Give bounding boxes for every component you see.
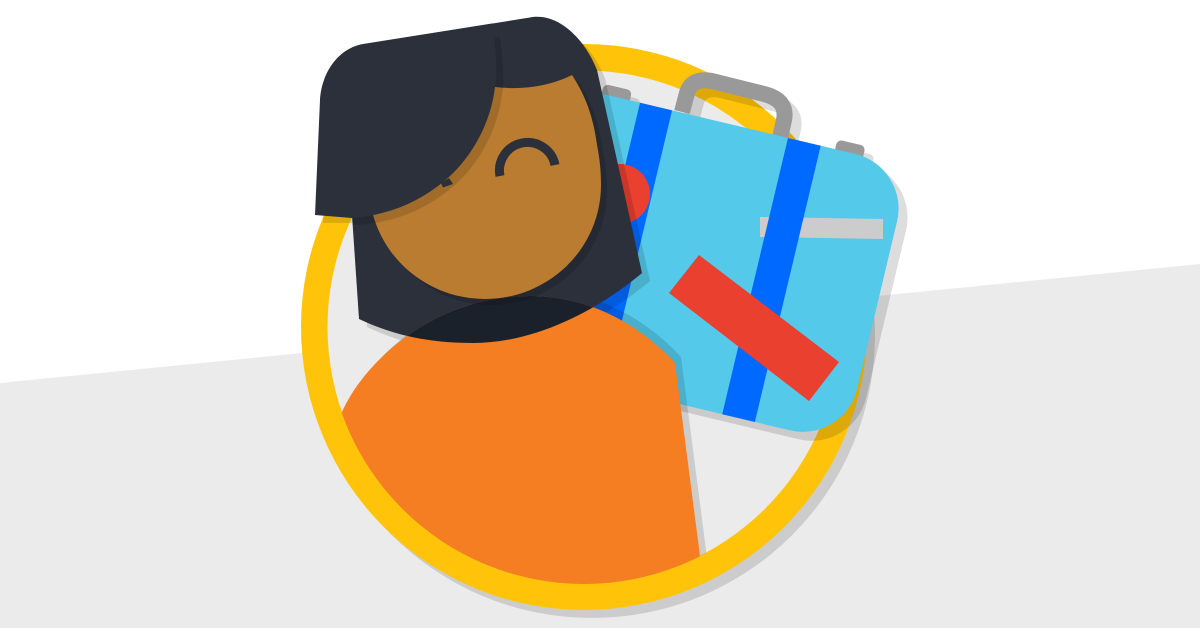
top hair bbox=[480, 17, 597, 88]
suitcase handle bbox=[682, 80, 785, 138]
suitcase bbox=[485, 72, 912, 443]
orange body bbox=[342, 296, 700, 584]
left eye stub bbox=[441, 178, 453, 188]
face bbox=[369, 60, 601, 299]
round red sticker bbox=[590, 164, 650, 224]
suitcase body bbox=[485, 72, 912, 443]
yellow ring bbox=[301, 44, 867, 610]
neck shade bbox=[407, 296, 594, 343]
suitcase shadow bbox=[494, 81, 921, 452]
face shadow bbox=[474, 296, 526, 304]
body shadow bbox=[384, 302, 706, 556]
red diagonal bar bbox=[669, 255, 839, 401]
right eye bbox=[499, 142, 555, 176]
blue straps bbox=[574, 103, 821, 422]
fringe shadow bbox=[352, 87, 503, 224]
grey label bbox=[760, 217, 883, 239]
hair shadow bbox=[323, 25, 650, 351]
fringe bbox=[315, 23, 496, 218]
back hair bbox=[352, 17, 642, 343]
ring shadow bbox=[309, 52, 875, 618]
